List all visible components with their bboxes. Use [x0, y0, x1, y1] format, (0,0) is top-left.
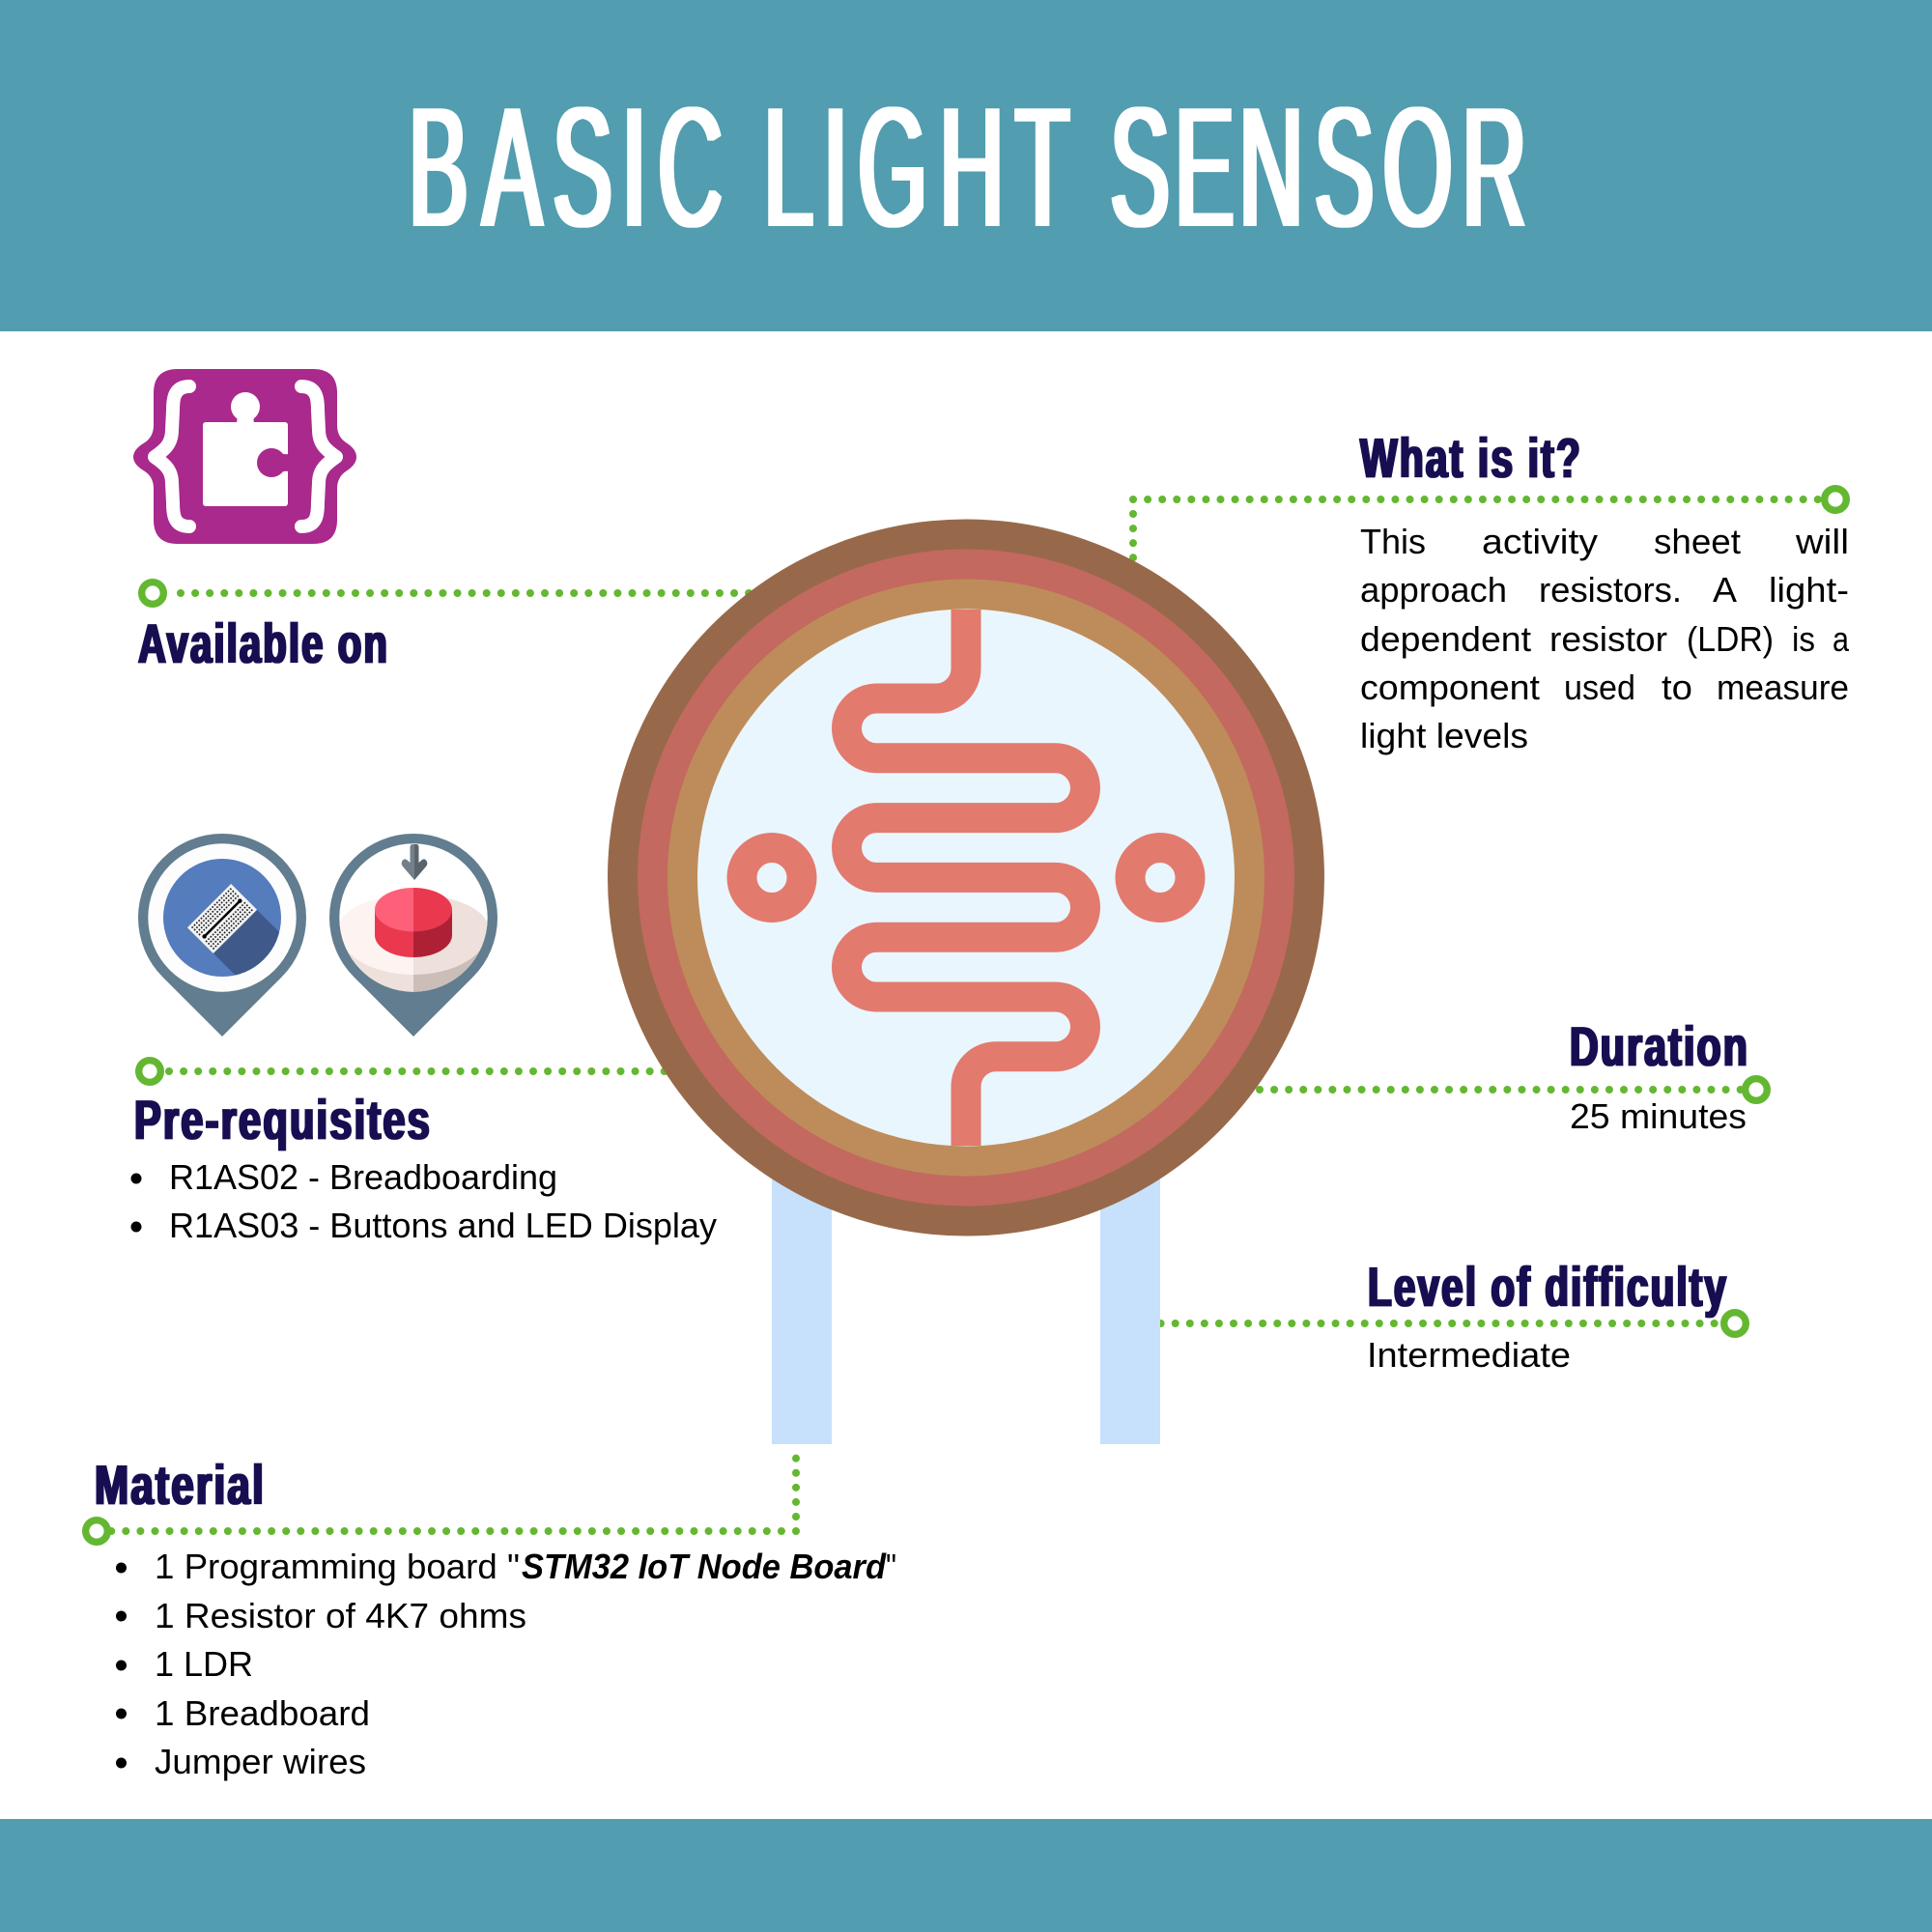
- text block: description: This: [1360, 522, 1426, 561]
- list: material: 1 Breadboard: [155, 1693, 370, 1733]
- list: material: ": [886, 1547, 896, 1586]
- text block: description: [1360, 522, 1850, 755]
- text block: description: a: [1833, 619, 1850, 659]
- heading: level of difficulty: Level of difficulty: [1368, 1257, 1728, 1319]
- text block: description: to: [1662, 668, 1692, 707]
- title: BASIC LIGHT SENSOR: [409, 71, 1526, 263]
- text block: description: will: [1795, 522, 1849, 561]
- connector: available on: [142, 582, 763, 604]
- text block: description: A: [1713, 570, 1737, 610]
- LDR terminal left: [742, 848, 802, 908]
- text block: description: used: [1564, 668, 1635, 707]
- text block: description: measure: [1717, 668, 1849, 707]
- text block: description: light levels: [1360, 716, 1528, 755]
- LDR terminal right: [1130, 848, 1190, 908]
- text block: description: resistors.: [1539, 570, 1682, 610]
- heading: pre-requisites: Pre-requisites: [134, 1090, 432, 1151]
- list: material: 1 Resistor of 4K7 ohms: [155, 1596, 526, 1635]
- LDR sensor illustration: [608, 520, 1324, 1444]
- list: pre-requisites: R1AS02 - Breadboarding: [169, 1157, 557, 1197]
- text block: description: is: [1792, 619, 1815, 659]
- text: duration value: 25 minutes: [1570, 1096, 1747, 1136]
- text block: description: light-: [1769, 570, 1849, 610]
- connector: material: [86, 1444, 796, 1542]
- icon: breadboard pin: [138, 834, 306, 1037]
- list: pre-requisites: [131, 1157, 717, 1245]
- heading: what is it: What is it?: [1360, 428, 1582, 490]
- list: material: [116, 1547, 896, 1781]
- list: material: STM32 IoT Node Board: [522, 1547, 887, 1586]
- connector: duration: [1260, 1079, 1767, 1100]
- list: pre-requisites: R1AS03 - Buttons and LED Display: [169, 1206, 717, 1245]
- text: difficulty value: Intermediate: [1367, 1335, 1571, 1375]
- text block: description: (LDR): [1687, 619, 1774, 659]
- footer band: [0, 1819, 1932, 1932]
- connector: pre-requisites: [139, 1061, 676, 1082]
- connector: level of difficulty: [1161, 1313, 1746, 1334]
- LDR serpentine track: [846, 610, 1086, 1146]
- header band: [0, 0, 1932, 331]
- LDR body rings: [608, 520, 1324, 1236]
- text block: description: activity: [1482, 522, 1598, 561]
- text block: description: dependent: [1360, 619, 1531, 659]
- list: material: 1 Programming board ": [155, 1547, 520, 1586]
- heading: material: Material: [95, 1455, 266, 1517]
- icon: push button pin: [328, 834, 498, 1037]
- text block: description: resistor: [1549, 619, 1667, 659]
- connector: what is it: [1133, 489, 1846, 570]
- heading: duration: Duration: [1570, 1016, 1749, 1078]
- heading: available on: Available on: [138, 613, 389, 675]
- text block: description: approach: [1360, 570, 1507, 610]
- text block: description: component: [1360, 668, 1540, 707]
- text block: description: sheet: [1654, 522, 1741, 561]
- icon: purple puzzle logo: [133, 369, 356, 544]
- list: material: 1 LDR: [155, 1644, 253, 1684]
- list: material: Jumper wires: [155, 1742, 366, 1781]
- LDR legs: [772, 1111, 1160, 1444]
